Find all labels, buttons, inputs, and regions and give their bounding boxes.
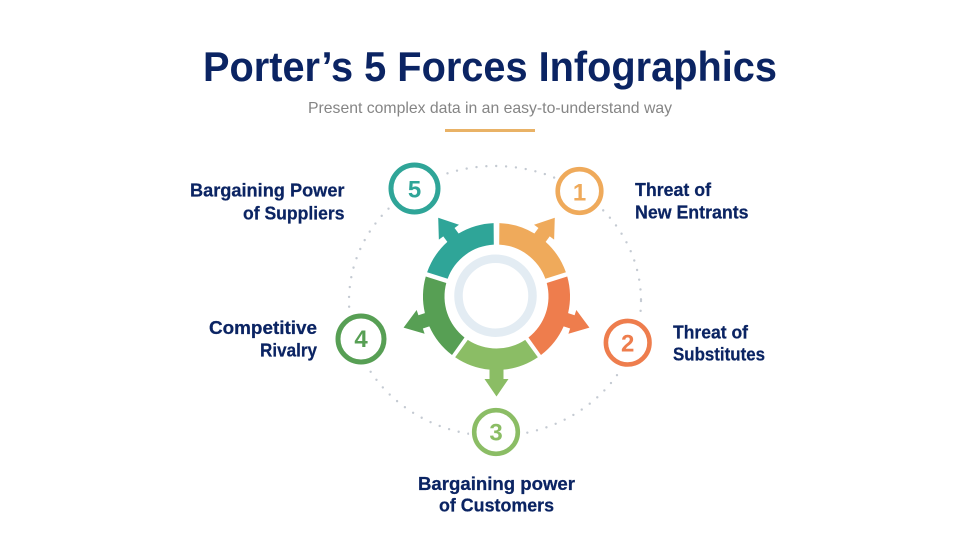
label: threat of new entrants: New Entrants xyxy=(635,202,748,223)
label: threat of substitutes: Threat of xyxy=(673,321,749,342)
label: bargaining power of suppliers: Bargaining Power xyxy=(190,180,344,201)
label: bargaining power of suppliers xyxy=(190,180,344,223)
segment 3 arrow xyxy=(455,340,538,396)
segment 2 arrow xyxy=(524,271,603,367)
badge 2: 2 xyxy=(621,330,634,358)
label: bargaining power of customers xyxy=(418,473,575,516)
arrow segments wheel xyxy=(390,193,603,396)
badge 3 xyxy=(469,405,523,459)
segment 4 arrow xyxy=(390,271,469,367)
center ring xyxy=(458,259,532,333)
subtitle: Present complex data in an easy-to-understand way xyxy=(308,100,672,117)
label: competitive rivalry: Competitive xyxy=(209,317,317,338)
title underline accent xyxy=(445,129,535,132)
label: threat of new entrants xyxy=(635,179,748,223)
badge 2 xyxy=(601,316,655,370)
segment 5 arrow xyxy=(405,193,504,286)
label: threat of substitutes xyxy=(673,321,765,365)
badge 5 xyxy=(386,160,442,216)
dotted orbit xyxy=(349,166,641,436)
label: threat of substitutes: Substitutes xyxy=(673,344,765,365)
label: bargaining power of suppliers: of Suppliers xyxy=(243,202,344,223)
badge 5: 5 xyxy=(408,176,421,204)
title: Porter’s 5 Forces Infographics xyxy=(203,43,777,90)
badge 3: 3 xyxy=(489,420,503,446)
badge 4 xyxy=(333,311,389,367)
label: competitive rivalry: Rivalry xyxy=(260,340,318,361)
label: bargaining power of customers: of Customers xyxy=(439,495,554,516)
label: threat of new entrants: Threat of xyxy=(635,179,712,200)
label: competitive rivalry xyxy=(209,317,318,361)
badge 1: 1 xyxy=(573,180,586,206)
segment 1 arrow xyxy=(489,193,588,286)
badge 1 xyxy=(552,164,606,218)
badge 4: 4 xyxy=(354,326,368,353)
label: bargaining power of customers: Bargaining power xyxy=(418,473,575,494)
